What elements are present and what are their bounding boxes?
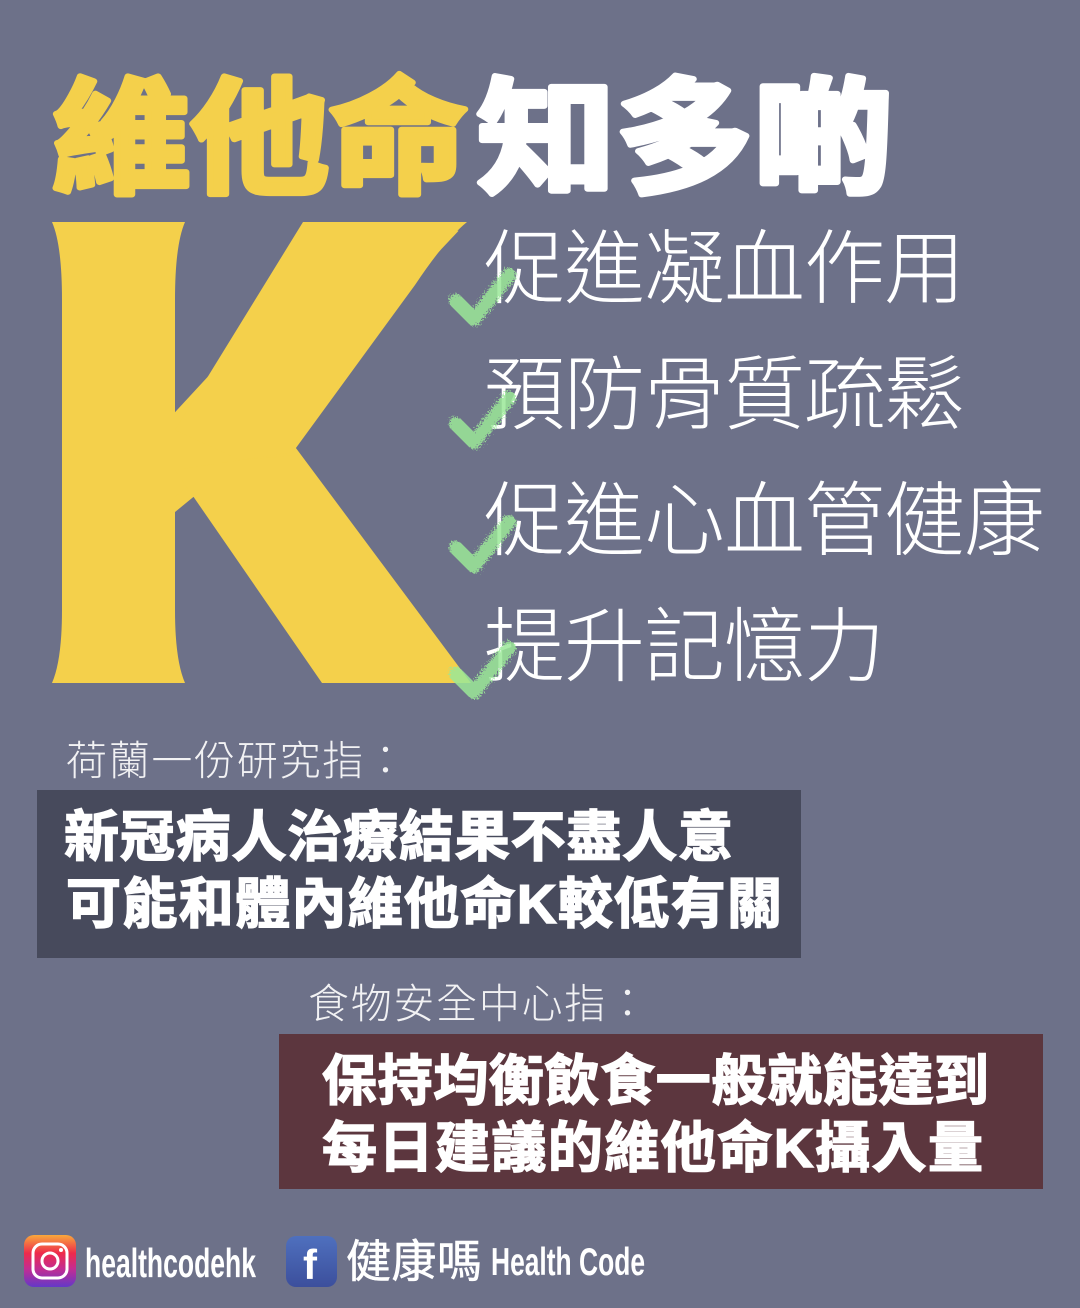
- footer: instagram: healthcodehk: [85, 1240, 256, 1286]
- panel: food safety advice: 保持均衡飲食一般就能達到: [322, 1050, 989, 1112]
- panel: study finding: [37, 790, 801, 958]
- panel: study finding: 新冠病人治療結果不盡人意: [64, 806, 733, 868]
- label: Centre for Food Safety: 食物安全中心指：: [308, 981, 648, 1027]
- big letter K: K: [35, 98, 465, 813]
- title: 知多啲: [477, 70, 893, 211]
- benefit 2: 預防骨質疏鬆: [484, 351, 965, 441]
- panel: study finding: 可能和體內維他命K較低有關: [66, 873, 782, 935]
- label: Dutch study: 荷蘭一份研究指：: [66, 738, 406, 784]
- benefit 1: 促進凝血作用: [484, 225, 965, 315]
- footer: facebook: [286, 1236, 645, 1288]
- benefit list: [484, 225, 1045, 693]
- panel: food safety advice: [279, 1034, 1043, 1189]
- icon: facebook: [286, 1236, 337, 1288]
- icon: facebook: f: [303, 1241, 318, 1288]
- check 2: [456, 398, 509, 442]
- check marks: [456, 275, 509, 692]
- benefit 3: 促進心血管健康: [484, 477, 1045, 567]
- title: [52, 70, 893, 211]
- check 3: [456, 522, 509, 566]
- panel: food safety advice: 每日建議的維他命K攝入量: [322, 1117, 983, 1179]
- footer: facebook: 健康嗎: [346, 1236, 482, 1287]
- footer: instagram: [24, 1235, 256, 1287]
- footer: facebook: Health Code: [491, 1241, 645, 1284]
- check 4: [456, 648, 509, 692]
- check 1: [456, 275, 509, 319]
- title: 維他命: [52, 70, 468, 211]
- icon: instagram: [24, 1235, 76, 1287]
- benefit 4: 提升記憶力: [484, 603, 885, 693]
